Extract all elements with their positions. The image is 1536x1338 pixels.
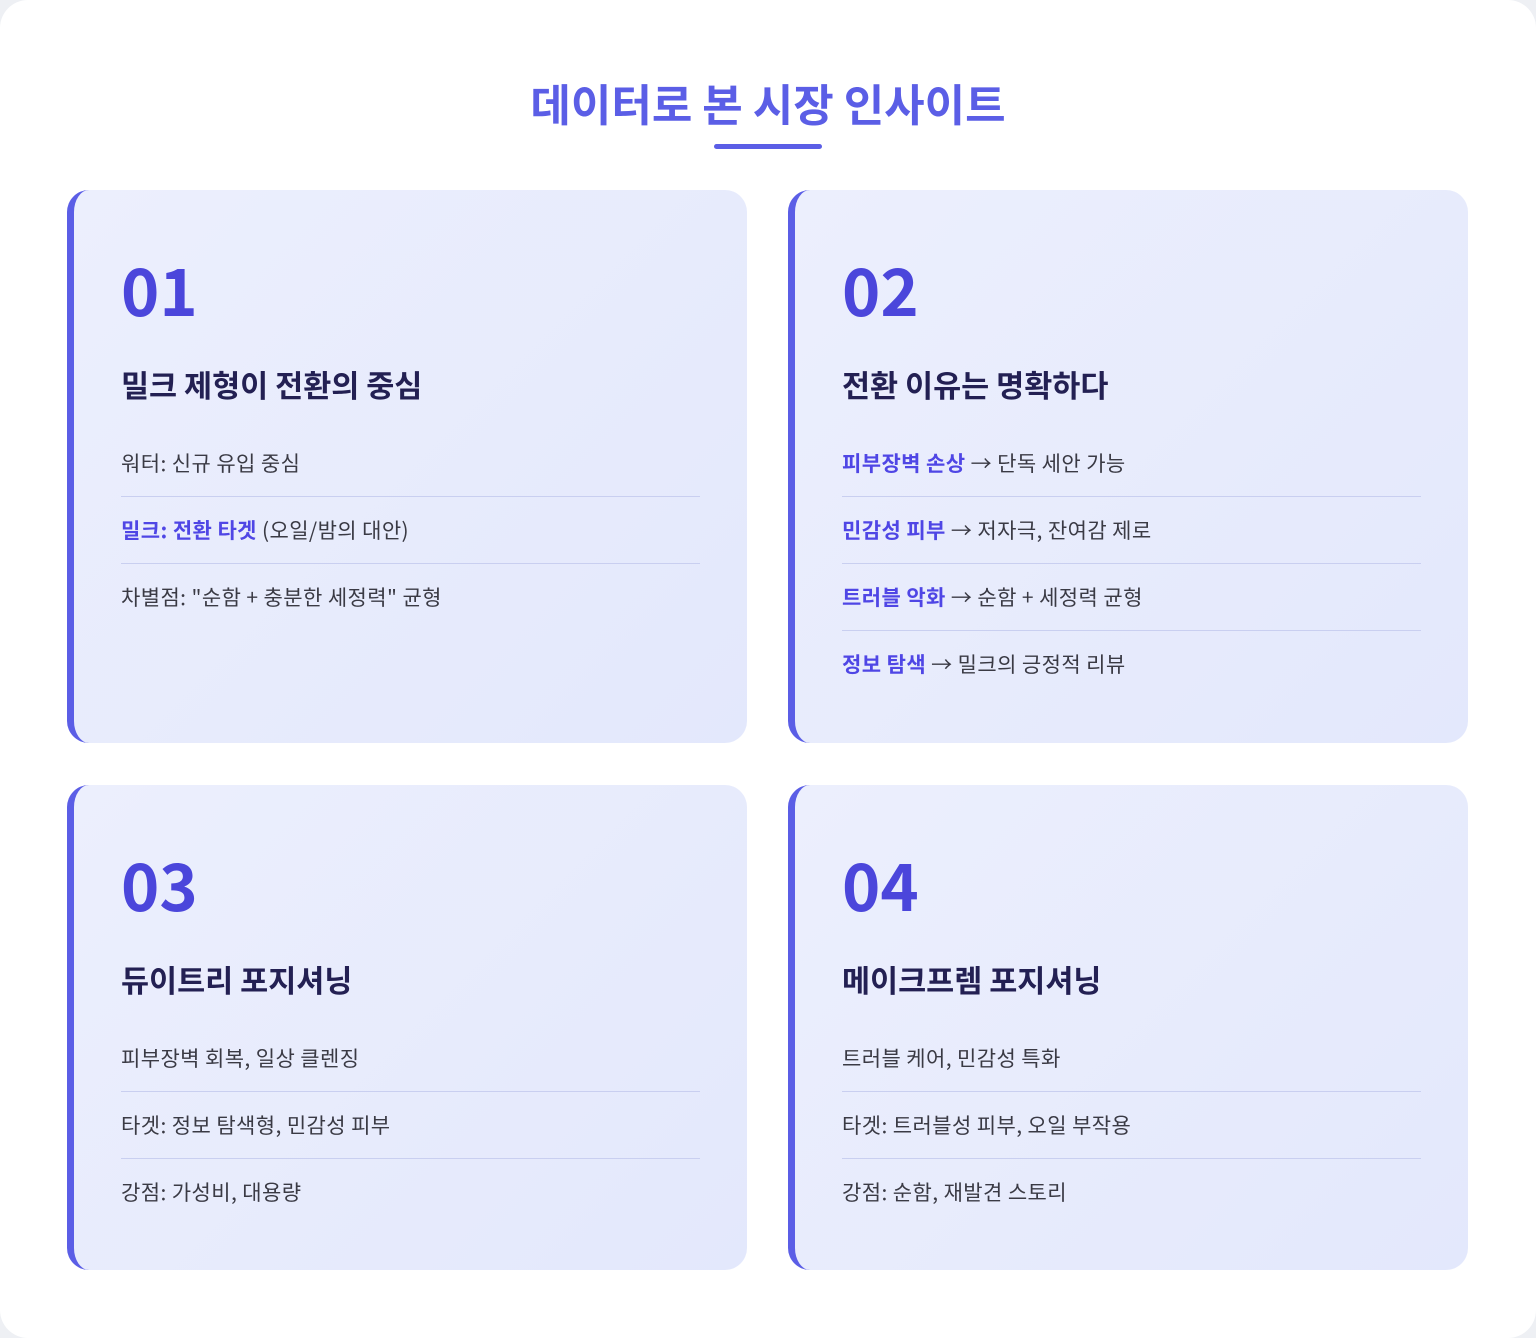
heading 03: 듀이트리 포지셔닝 (121, 957, 352, 1001)
list 02: 정보 탐색 → 밀크의 긍정적 리뷰 (842, 649, 1126, 679)
list 04: 타겟: 트러블성 피부, 오일 부작용 (842, 1110, 1131, 1140)
list 01 (121, 448, 700, 612)
list 02: 피부장벽 손상 → 단독 세안 가능 (842, 448, 1126, 478)
number 01: 01 (121, 241, 198, 335)
panel: 04 (788, 785, 1468, 1270)
list 03: 피부장벽 회복, 일상 클렌징 (121, 1043, 359, 1073)
number 02: 02 (842, 241, 919, 335)
number 04: 04 (842, 836, 919, 930)
list 01: 차별점: "순함 + 충분한 세정력" 균형 (121, 582, 442, 612)
list 03 (121, 1043, 700, 1207)
panel: 03 (67, 785, 747, 1270)
list 04: 트러블 케어, 민감성 특화 (842, 1043, 1061, 1073)
list 01: 워터: 신규 유입 중심 (121, 448, 300, 478)
panel: 01 (67, 190, 747, 743)
list 01: 밀크: 전환 타겟 (오일/밤의 대안) (121, 515, 409, 545)
list 04: 강점: 순함, 재발견 스토리 (842, 1177, 1067, 1207)
number 03: 03 (121, 836, 198, 930)
list 04 (842, 1043, 1421, 1207)
list 03: 타겟: 정보 탐색형, 민감성 피부 (121, 1110, 391, 1140)
heading 01: 밀크 제형이 전환의 중심 (121, 362, 422, 406)
list 02: 민감성 피부 → 저자극, 잔여감 제로 (842, 515, 1152, 545)
list 03: 강점: 가성비, 대용량 (121, 1177, 301, 1207)
title: 데이터로 본 시장 인사이트 (530, 70, 1006, 134)
panel: 02 (788, 190, 1468, 743)
heading 04: 메이크프렘 포지셔닝 (842, 957, 1101, 1001)
list 02: 트러블 악화 → 순함 + 세정력 균형 (842, 582, 1143, 612)
list 02 (842, 448, 1421, 679)
heading 02: 전환 이유는 명확하다 (842, 362, 1108, 406)
